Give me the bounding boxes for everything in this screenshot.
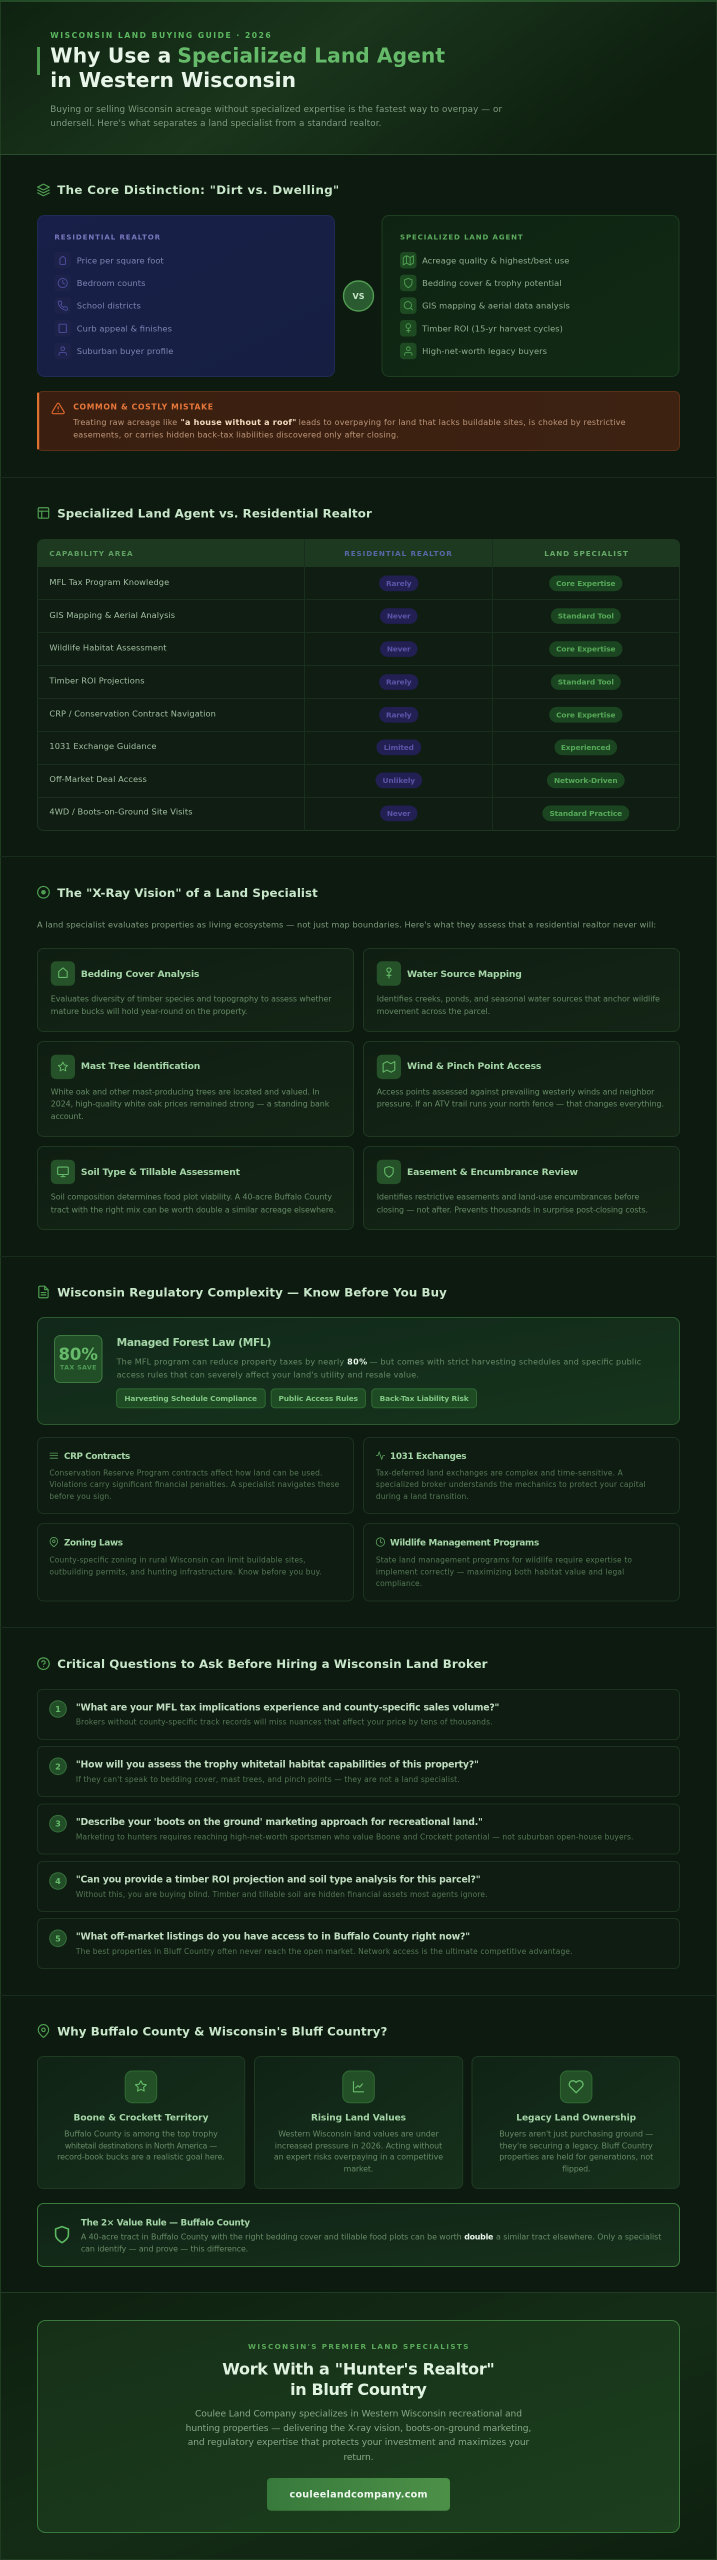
- description: and regulatory expertise that protects your investment and maximizes your: [188, 2438, 530, 2448]
- card: easement: closing — not after. Prevents thousands in surprise post-closing costs.: [377, 1205, 648, 1214]
- row: GIS: Never: [387, 612, 411, 621]
- tag: back-tax: Back-Tax Liability Risk: [380, 1394, 470, 1403]
- card: rising land values: [254, 2056, 463, 2188]
- icon: map pin: [38, 2025, 49, 2037]
- row: GIS: GIS Mapping & Aerial Analysis: [49, 610, 175, 620]
- title: [222, 2360, 495, 2399]
- title: in Bluff Country: [290, 2380, 427, 2399]
- heading: Critical Questions to Ask Before Hiring a Wisconsin Land Broker: [57, 1657, 488, 1671]
- table header row: CAPABILITY AREA: [49, 549, 133, 558]
- question 2: [38, 1746, 680, 1796]
- title: Managed Forest Law (MFL): [117, 1337, 271, 1349]
- main title: Why Use a: [50, 43, 171, 67]
- card: CRP contracts: CRP Contracts: [64, 1452, 130, 1462]
- row: MFL: MFL Tax Program Knowledge: [49, 577, 169, 587]
- body: The MFL program can reduce property taxes by nearly: [116, 1358, 344, 1367]
- question 2: "How will you assess the trophy whitetail habitat capabilities of this property?": [76, 1759, 479, 1770]
- card: boone and crockett: [38, 2056, 245, 2188]
- question 3: 3: [55, 1819, 61, 1829]
- row: 4WD: Never: [387, 809, 411, 818]
- item: curb appeal: [54, 320, 172, 336]
- item: price per square foot: Price per square foot: [77, 255, 164, 265]
- card: 1031 exchanges: during a land transition.: [376, 1492, 469, 1501]
- subtitle: undersell. Here's what separates a land specialist from a standard realtor.: [50, 119, 381, 129]
- heading: COMMON & COSTLY MISTAKE: [73, 403, 213, 412]
- description: hunting properties — delivering the X-ray vision, boots-on-ground marketing,: [186, 2424, 531, 2434]
- body: easements, or carries hidden back-tax liabilities discovered only after closing.: [73, 431, 399, 440]
- button: couleelandcompany.com: [290, 2490, 428, 2501]
- icon: layers: [38, 184, 49, 196]
- question 4: Without this, you are buying blind. Timber and tillable soil are hidden financial assets most agents ignore.: [76, 1890, 488, 1899]
- accent bar: [37, 47, 40, 75]
- body: [116, 1358, 641, 1380]
- row: 4WD: [49, 806, 629, 821]
- card: boone and crockett: Buffalo County is among the top trophy: [64, 2129, 218, 2138]
- row: off-market: Off-Market Deal Access: [49, 774, 147, 784]
- card: water source: Water Source Mapping: [407, 969, 522, 980]
- row: 1031: Limited: [384, 743, 414, 752]
- row: CRP: Core Expertise: [556, 710, 616, 719]
- card: 1031 exchanges: specialized broker understands the mechanics to protect your capital: [376, 1480, 646, 1489]
- item: acreage: [400, 252, 569, 268]
- item: GIS: GIS mapping & aerial data analysis: [422, 301, 570, 311]
- icon: table: [38, 508, 49, 518]
- card: wildlife management: compliance.: [376, 1579, 422, 1588]
- card: easement: Identifies restrictive easements and land-use encumbrances before: [377, 1193, 639, 1202]
- card: CRP contracts: Conservation Reserve Program contracts affect how land can be used.: [49, 1468, 322, 1478]
- body: access rules that can severely affect your land's utility and resale value.: [117, 1371, 419, 1380]
- card: mast tree: account.: [51, 1112, 84, 1121]
- eyebrow: WISCONSIN'S PREMIER LAND SPECIALISTS: [248, 2342, 468, 2351]
- tag: harvesting: [117, 1389, 265, 1408]
- question 2: If they can't speak to bedding cover, mast trees, and pinch points — they are not a land specialist.: [76, 1775, 460, 1784]
- main title: Specialized Land Agent: [177, 43, 445, 67]
- subtitle: Buying or selling Wisconsin acreage without specialized expertise is the fastest way to overpay — or: [50, 105, 502, 115]
- row: GIS: [49, 608, 621, 624]
- question 5: 5: [55, 1933, 61, 1943]
- body: Treating raw acreage like: [72, 418, 177, 427]
- question 5: [38, 1918, 680, 1968]
- item: legacy buyers: [400, 343, 547, 359]
- heading: Specialized Land Agent vs. Residential Realtor: [57, 506, 372, 520]
- VS badge: VS: [353, 292, 365, 301]
- title: The 2× Value Rule — Buffalo County: [81, 2218, 250, 2228]
- row: wildlife: Core Expertise: [556, 645, 616, 654]
- question 5: The best properties in Bluff Country often never reach the open market. Network access is the ultimate competitive advantage.: [75, 1947, 573, 1956]
- question 4: "Can you provide a timber ROI projection and soil type analysis for this parcel?": [76, 1874, 481, 1885]
- row: wildlife: [49, 641, 622, 657]
- item: bedding: [400, 275, 562, 291]
- body: [81, 2233, 661, 2254]
- label: SPECIALIZED LAND AGENT: [400, 233, 523, 241]
- card: bedding cover: Evaluates diversity of timber species and topography to assess whether: [51, 994, 332, 1003]
- card: 1031 exchanges: [364, 1438, 680, 1514]
- card: bedding cover: mature bucks will hold year-round on the property.: [51, 1007, 247, 1016]
- card: mast tree: White oak and other mast-producing trees are located and valued. In: [51, 1088, 320, 1097]
- intro text: A land specialist evaluates properties as living ecosystems — not just map boundaries. Here's what they assess that a residential realtor never will:: [37, 920, 656, 930]
- item: suburban buyer: [54, 343, 173, 359]
- question 4: [38, 1862, 680, 1912]
- callout: 2x value rule: [38, 2204, 680, 2266]
- card: rising land values: an expert risks overpaying in a competitive: [274, 2153, 443, 2162]
- item: bedroom counts: [54, 275, 145, 291]
- item: school districts: [54, 297, 141, 314]
- question 4: 4: [55, 1876, 61, 1886]
- card: water source: [364, 948, 680, 1032]
- item: bedding: Bedding cover & trophy potential: [422, 278, 562, 288]
- row: timber: [48, 674, 621, 690]
- question 2: 2: [55, 1761, 61, 1771]
- row: 1031: [49, 740, 617, 755]
- card: boone and crockett: Boone & Crockett Territory: [74, 2114, 209, 2124]
- eyebrow: WISCONSIN LAND BUYING GUIDE · 2026: [50, 31, 271, 40]
- panel: managed forest law: [38, 1318, 680, 1424]
- card: easement: Easement & Encumbrance Review: [407, 1167, 578, 1178]
- item: suburban buyer: Suburban buyer profile: [77, 346, 173, 356]
- row: 1031: 1031 Exchange Guidance: [49, 741, 156, 751]
- row: timber: Rarely: [386, 678, 412, 687]
- card: legacy ownership: they're securing a legacy. Bluff Country: [500, 2141, 653, 2150]
- item: timber ROI: [400, 320, 563, 336]
- body: can identify — and prove — this difference.: [81, 2245, 248, 2254]
- main title: [50, 43, 445, 92]
- section: x-ray vision: [37, 886, 680, 1230]
- heading: Wisconsin Regulatory Complexity — Know Before You Buy: [57, 1286, 447, 1300]
- card: rising land values: Rising Land Values: [311, 2114, 406, 2124]
- card: wind and pinch: Access points assessed against prevailing westerly winds and neighbor: [377, 1088, 655, 1097]
- card: easement: [364, 1146, 680, 1230]
- tag: back-tax: [372, 1389, 476, 1408]
- card: water source: movement across the parcel.: [377, 1007, 490, 1016]
- card: zoning laws: [38, 1524, 354, 1601]
- card: 1031 exchanges: 1031 Exchanges: [390, 1452, 466, 1462]
- icon: target: [38, 886, 49, 898]
- table header row: [49, 549, 628, 558]
- row: MFL: [49, 576, 622, 591]
- item: acreage: Acreage quality & highest/best use: [422, 255, 569, 265]
- item: bedroom counts: Bedroom counts: [77, 278, 145, 288]
- tag: public access: Public Access Rules: [278, 1394, 359, 1403]
- row: GIS: Standard Tool: [558, 612, 614, 621]
- label: RESIDENTIAL REALTOR: [54, 233, 161, 241]
- body: A 40-acre tract in Buffalo County with the right bedding cover and tillable food plots can be worth: [81, 2233, 462, 2242]
- card: wind and pinch: Wind & Pinch Point Access: [407, 1061, 542, 1072]
- tag: public access: [271, 1389, 365, 1408]
- body: 80%: [347, 1358, 367, 1367]
- button: [267, 2478, 450, 2511]
- section: critical questions: [38, 1657, 680, 1968]
- table header row: LAND SPECIALIST: [544, 549, 628, 558]
- card: bedding cover: [38, 948, 354, 1032]
- VS badge: [344, 281, 374, 311]
- body: double: [464, 2233, 493, 2242]
- row: 1031: Experienced: [561, 743, 611, 752]
- title: Work With a "Hunter's Realtor": [222, 2360, 495, 2379]
- heading: The Core Distinction: "Dirt vs. Dwelling": [57, 183, 339, 197]
- row: timber: Standard Tool: [558, 678, 614, 687]
- stat badge: [54, 1336, 102, 1382]
- panel: cta card: [38, 2320, 680, 2532]
- question 1: 1: [55, 1704, 61, 1714]
- question 1: "What are your MFL tax implications experience and county-specific sales volume?": [76, 1702, 499, 1713]
- icon: warning: [52, 403, 64, 414]
- row: off-market: Unlikely: [383, 776, 415, 785]
- table header row: RESIDENTIAL REALTOR: [344, 549, 452, 558]
- heading: Why Buffalo County & Wisconsin's Bluff Country?: [57, 2024, 387, 2038]
- card: boone and crockett: record-book bucks are a realistic goal here.: [57, 2153, 225, 2162]
- heading: The "X-Ray Vision" of a Land Specialist: [57, 886, 318, 900]
- section: call to action: [0, 2292, 717, 2559]
- body: — but comes with strict harvesting schedules and specific public: [370, 1358, 641, 1367]
- card: zoning laws: Zoning Laws: [64, 1539, 123, 1549]
- comparison table: [38, 540, 680, 830]
- row: CRP: CRP / Conservation Contract Navigation: [49, 708, 216, 718]
- card: bedding cover: Bedding Cover Analysis: [81, 969, 200, 980]
- item: GIS: [400, 297, 570, 314]
- question 3: [38, 1804, 680, 1854]
- question 1: [38, 1690, 680, 1740]
- card: 1031 exchanges: Tax-deferred land exchanges are complex and time-sensitive. A: [375, 1468, 624, 1478]
- card: wildlife management: State land management programs for wildlife require expertise to: [376, 1555, 632, 1564]
- panel: residential realtor: [38, 216, 334, 376]
- section: comparison table: [38, 506, 680, 830]
- card: mast tree: Mast Tree Identification: [81, 1061, 200, 1072]
- item: school districts: School districts: [77, 301, 141, 311]
- item: price per square foot: [54, 252, 164, 268]
- body: a similar tract elsewhere. Only a specialist: [496, 2233, 661, 2242]
- card: soil type: Soil composition determines food plot viability. A 40-acre Buffalo County: [51, 1193, 332, 1202]
- section: buffalo county: [38, 2024, 680, 2266]
- item: curb appeal: Curb appeal & finishes: [77, 323, 172, 333]
- card: wind and pinch: [364, 1042, 680, 1136]
- card: zoning laws: County-specific zoning in rural Wisconsin can limit buildable sites,: [49, 1555, 306, 1564]
- card: wildlife management: [364, 1524, 680, 1601]
- question 5: "What off-market listings do you have access to in Buffalo County right now?": [76, 1932, 470, 1943]
- card: legacy ownership: Legacy Land Ownership: [516, 2114, 637, 2124]
- subtitle: [50, 105, 502, 129]
- icon: question: [38, 1658, 49, 1669]
- main title: in Western Wisconsin: [50, 68, 296, 92]
- card: wildlife management: implement correctly — maximizing both habitat value and legal: [376, 1567, 624, 1576]
- icon: document: [39, 1286, 48, 1298]
- card: zoning laws: outbuilding permits, and hunting infrastructure. Know before you buy.: [49, 1567, 322, 1576]
- card: wildlife management: Wildlife Management Programs: [390, 1539, 539, 1549]
- row: CRP: [49, 707, 622, 723]
- section: core distinction: [37, 183, 680, 450]
- card: mast tree: [38, 1042, 354, 1136]
- row: CRP: Rarely: [386, 710, 412, 719]
- card: water source: Identifies creeks, ponds, and seasonal water sources that anchor wildlife: [377, 994, 660, 1003]
- body: "a house without a roof": [181, 418, 296, 427]
- row: 4WD: Standard Practice: [549, 809, 622, 818]
- card: rising land values: Western Wisconsin land values are under: [278, 2129, 440, 2138]
- section: regulatory complexity: [38, 1286, 680, 1601]
- card: CRP contracts: [38, 1438, 354, 1514]
- card: legacy ownership: flipped.: [562, 2165, 591, 2174]
- row: timber: Timber ROI Projections: [48, 675, 144, 685]
- card: CRP contracts: before you sign.: [49, 1492, 112, 1501]
- card: CRP contracts: Violations carry significant financial penalties. A specialist navigates these: [49, 1480, 340, 1489]
- question 3: Marketing to hunters requires reaching high-net-worth sportsmen who value Boone and Crockett potential — not suburban open-house buyers.: [76, 1832, 633, 1842]
- question 3: "Describe your 'boots on the ground' marketing approach for recreational land.": [76, 1817, 483, 1828]
- card: wind and pinch: pressure. If an ATV trail runs your north fence — that changes everything.: [377, 1100, 664, 1109]
- item: timber ROI: Timber ROI (15-yr harvest cycles): [421, 323, 563, 333]
- row: MFL: Core Expertise: [556, 579, 616, 588]
- tag: harvesting: Harvesting Schedule Compliance: [124, 1394, 257, 1403]
- card: rising land values: market.: [344, 2165, 373, 2174]
- description: return.: [344, 2453, 374, 2463]
- body: leads to overpaying for land that lacks buildable sites, is choked by restrictive: [299, 418, 626, 427]
- card: soil type: tract with the right mix can be worth double a similar acreage elsewhere.: [51, 1205, 336, 1214]
- card: soil type: [38, 1146, 354, 1230]
- card: soil type: Soil Type & Tillable Assessment: [81, 1167, 241, 1178]
- stat badge: 80%: [58, 1345, 98, 1364]
- row: MFL: Rarely: [386, 579, 412, 588]
- header banner: [0, 0, 717, 154]
- row: wildlife: Wildlife Habitat Assessment: [49, 643, 167, 653]
- icon: shield: [56, 2227, 68, 2243]
- card: boone and crockett: whitetail destinations in North America —: [65, 2141, 217, 2150]
- callout: costly mistake: [37, 392, 680, 450]
- item: legacy buyers: High-net-worth legacy buyers: [422, 346, 547, 356]
- row: off-market: Network-Driven: [554, 776, 618, 785]
- row: off-market: [49, 772, 625, 788]
- description: Coulee Land Company specializes in Western Wisconsin recreational and: [195, 2410, 522, 2420]
- card: mast tree: 2024, high-quality white oak prices remained strong — a standing bank: [51, 1100, 330, 1109]
- card: legacy ownership: properties are held for generations, not: [499, 2153, 653, 2162]
- row: wildlife: Never: [387, 645, 411, 654]
- panel: specialized land agent: [382, 216, 679, 376]
- body: [72, 418, 626, 440]
- card: rising land values: increased pressure in 2026. Acting without: [275, 2141, 442, 2150]
- stat badge: TAX SAVE: [60, 1363, 96, 1371]
- row: 4WD: 4WD / Boots-on-Ground Site Visits: [49, 807, 193, 817]
- description: [186, 2410, 531, 2463]
- card: legacy ownership: Buyers aren't just purchasing ground —: [499, 2129, 653, 2138]
- card: legacy ownership: [472, 2056, 680, 2188]
- question 1: Brokers without county-specific track records will miss nuances that affect your price by tens of thousands.: [76, 1718, 493, 1726]
